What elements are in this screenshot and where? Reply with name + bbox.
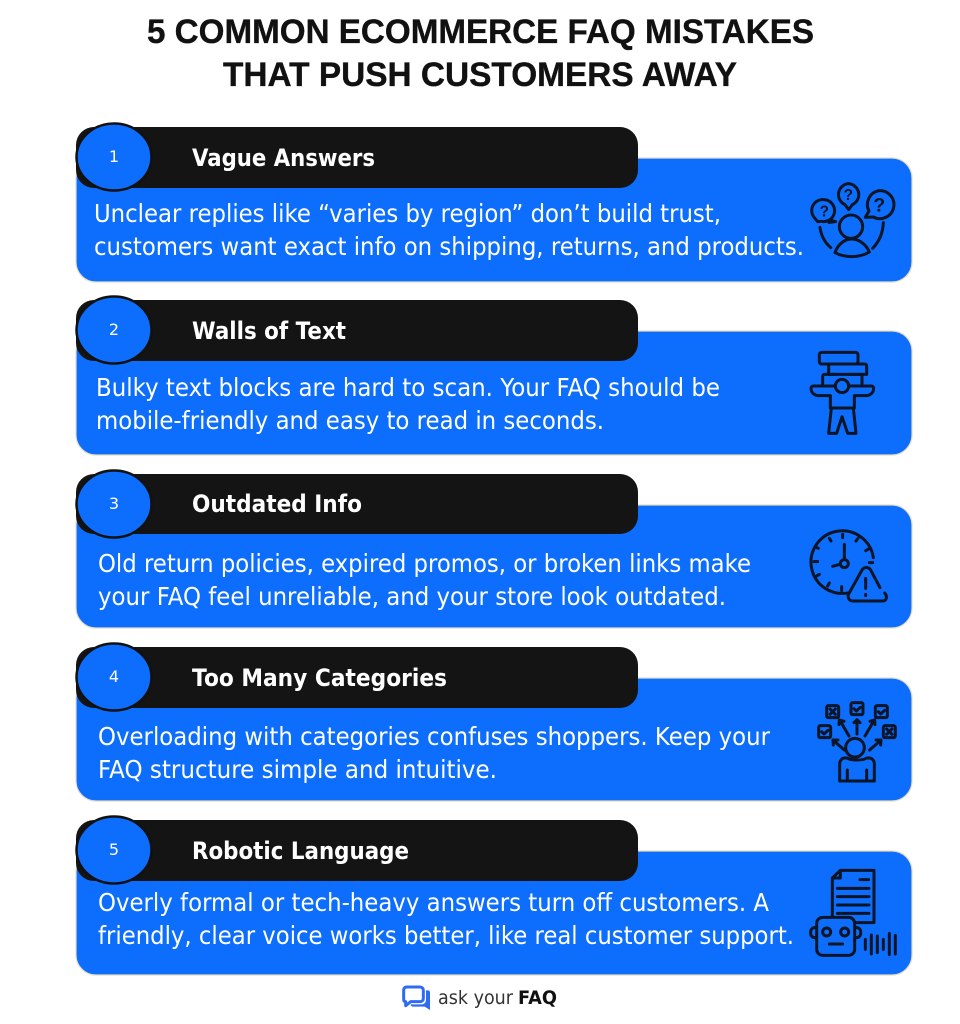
number badge 2 [76, 296, 152, 364]
icon: person balancing stacked blocks [811, 352, 874, 433]
number badge 3 [76, 470, 152, 538]
number badge 3: 3 [109, 494, 119, 513]
icon: person with question bubbles: ? [873, 195, 885, 216]
text: walls of text [96, 373, 720, 435]
number badge 1: 1 [109, 147, 119, 166]
text: vague answers: customers want exact info on shipping, returns, and products. [94, 232, 804, 261]
text: vague answers: Unclear replies like “varies by region” don’t build trust, [94, 199, 721, 228]
text: outdated info: your FAQ feel unreliable, and your store look outdated. [98, 582, 726, 611]
text: outdated info: Old return policies, expired promos, or broken links make [98, 549, 751, 578]
text: robotic language [98, 888, 794, 950]
title: 5 COMMON ECOMMERCE FAQ MISTAKES [147, 13, 814, 51]
heading: outdated info: Outdated Info [192, 490, 362, 518]
icon: clock with warning triangle [811, 531, 886, 601]
number badge 5: 5 [109, 840, 119, 859]
icon: person with question bubbles [812, 184, 894, 257]
panel: outdated info [76, 470, 912, 628]
panel: walls of text [76, 296, 912, 455]
logo: ask your FAQ: FAQ [518, 987, 557, 1009]
number badge 1 [76, 124, 152, 190]
number badge 5 [76, 816, 152, 884]
title: THAT PUSH CUSTOMERS AWAY [223, 56, 737, 94]
text: vague answers [94, 199, 804, 261]
text: too many categories [98, 722, 771, 784]
panel: too many categories [76, 644, 912, 801]
heading: walls of text: Walls of Text [192, 317, 346, 345]
text: walls of text: mobile-friendly and easy to read in seconds. [96, 406, 604, 435]
panel: robotic language [76, 816, 912, 975]
number badge 2: 2 [109, 320, 119, 339]
text: robotic language: friendly, clear voice works better, like real customer support. [98, 921, 794, 950]
icon: person choosing among options [819, 703, 895, 781]
text: too many categories: FAQ structure simple and intuitive. [98, 755, 497, 784]
title [147, 13, 814, 94]
heading: too many categories: Too Many Categories [192, 664, 447, 692]
heading: vague answers: Vague Answers [192, 144, 375, 172]
number badge 4 [76, 644, 152, 710]
logo: ask your FAQ: ask your [438, 987, 513, 1009]
panel: vague answers [76, 124, 912, 282]
logo: ask your FAQ [404, 987, 557, 1010]
text: robotic language: Overly formal or tech-heavy answers turn off customers. A [98, 888, 769, 917]
icon: person with question bubbles: ? [820, 203, 829, 220]
number badge 4: 4 [109, 667, 119, 686]
text: walls of text: Bulky text blocks are hard to scan. Your FAQ should be [96, 373, 720, 402]
icon: person with question bubbles: ? [844, 187, 853, 204]
icon: robot with document and sound wave [811, 870, 895, 955]
text: too many categories: Overloading with categories confuses shoppers. Keep your [98, 722, 771, 751]
icon: chat bubbles [404, 987, 430, 1010]
heading: robotic language: Robotic Language [192, 837, 409, 865]
text: outdated info [98, 549, 751, 611]
